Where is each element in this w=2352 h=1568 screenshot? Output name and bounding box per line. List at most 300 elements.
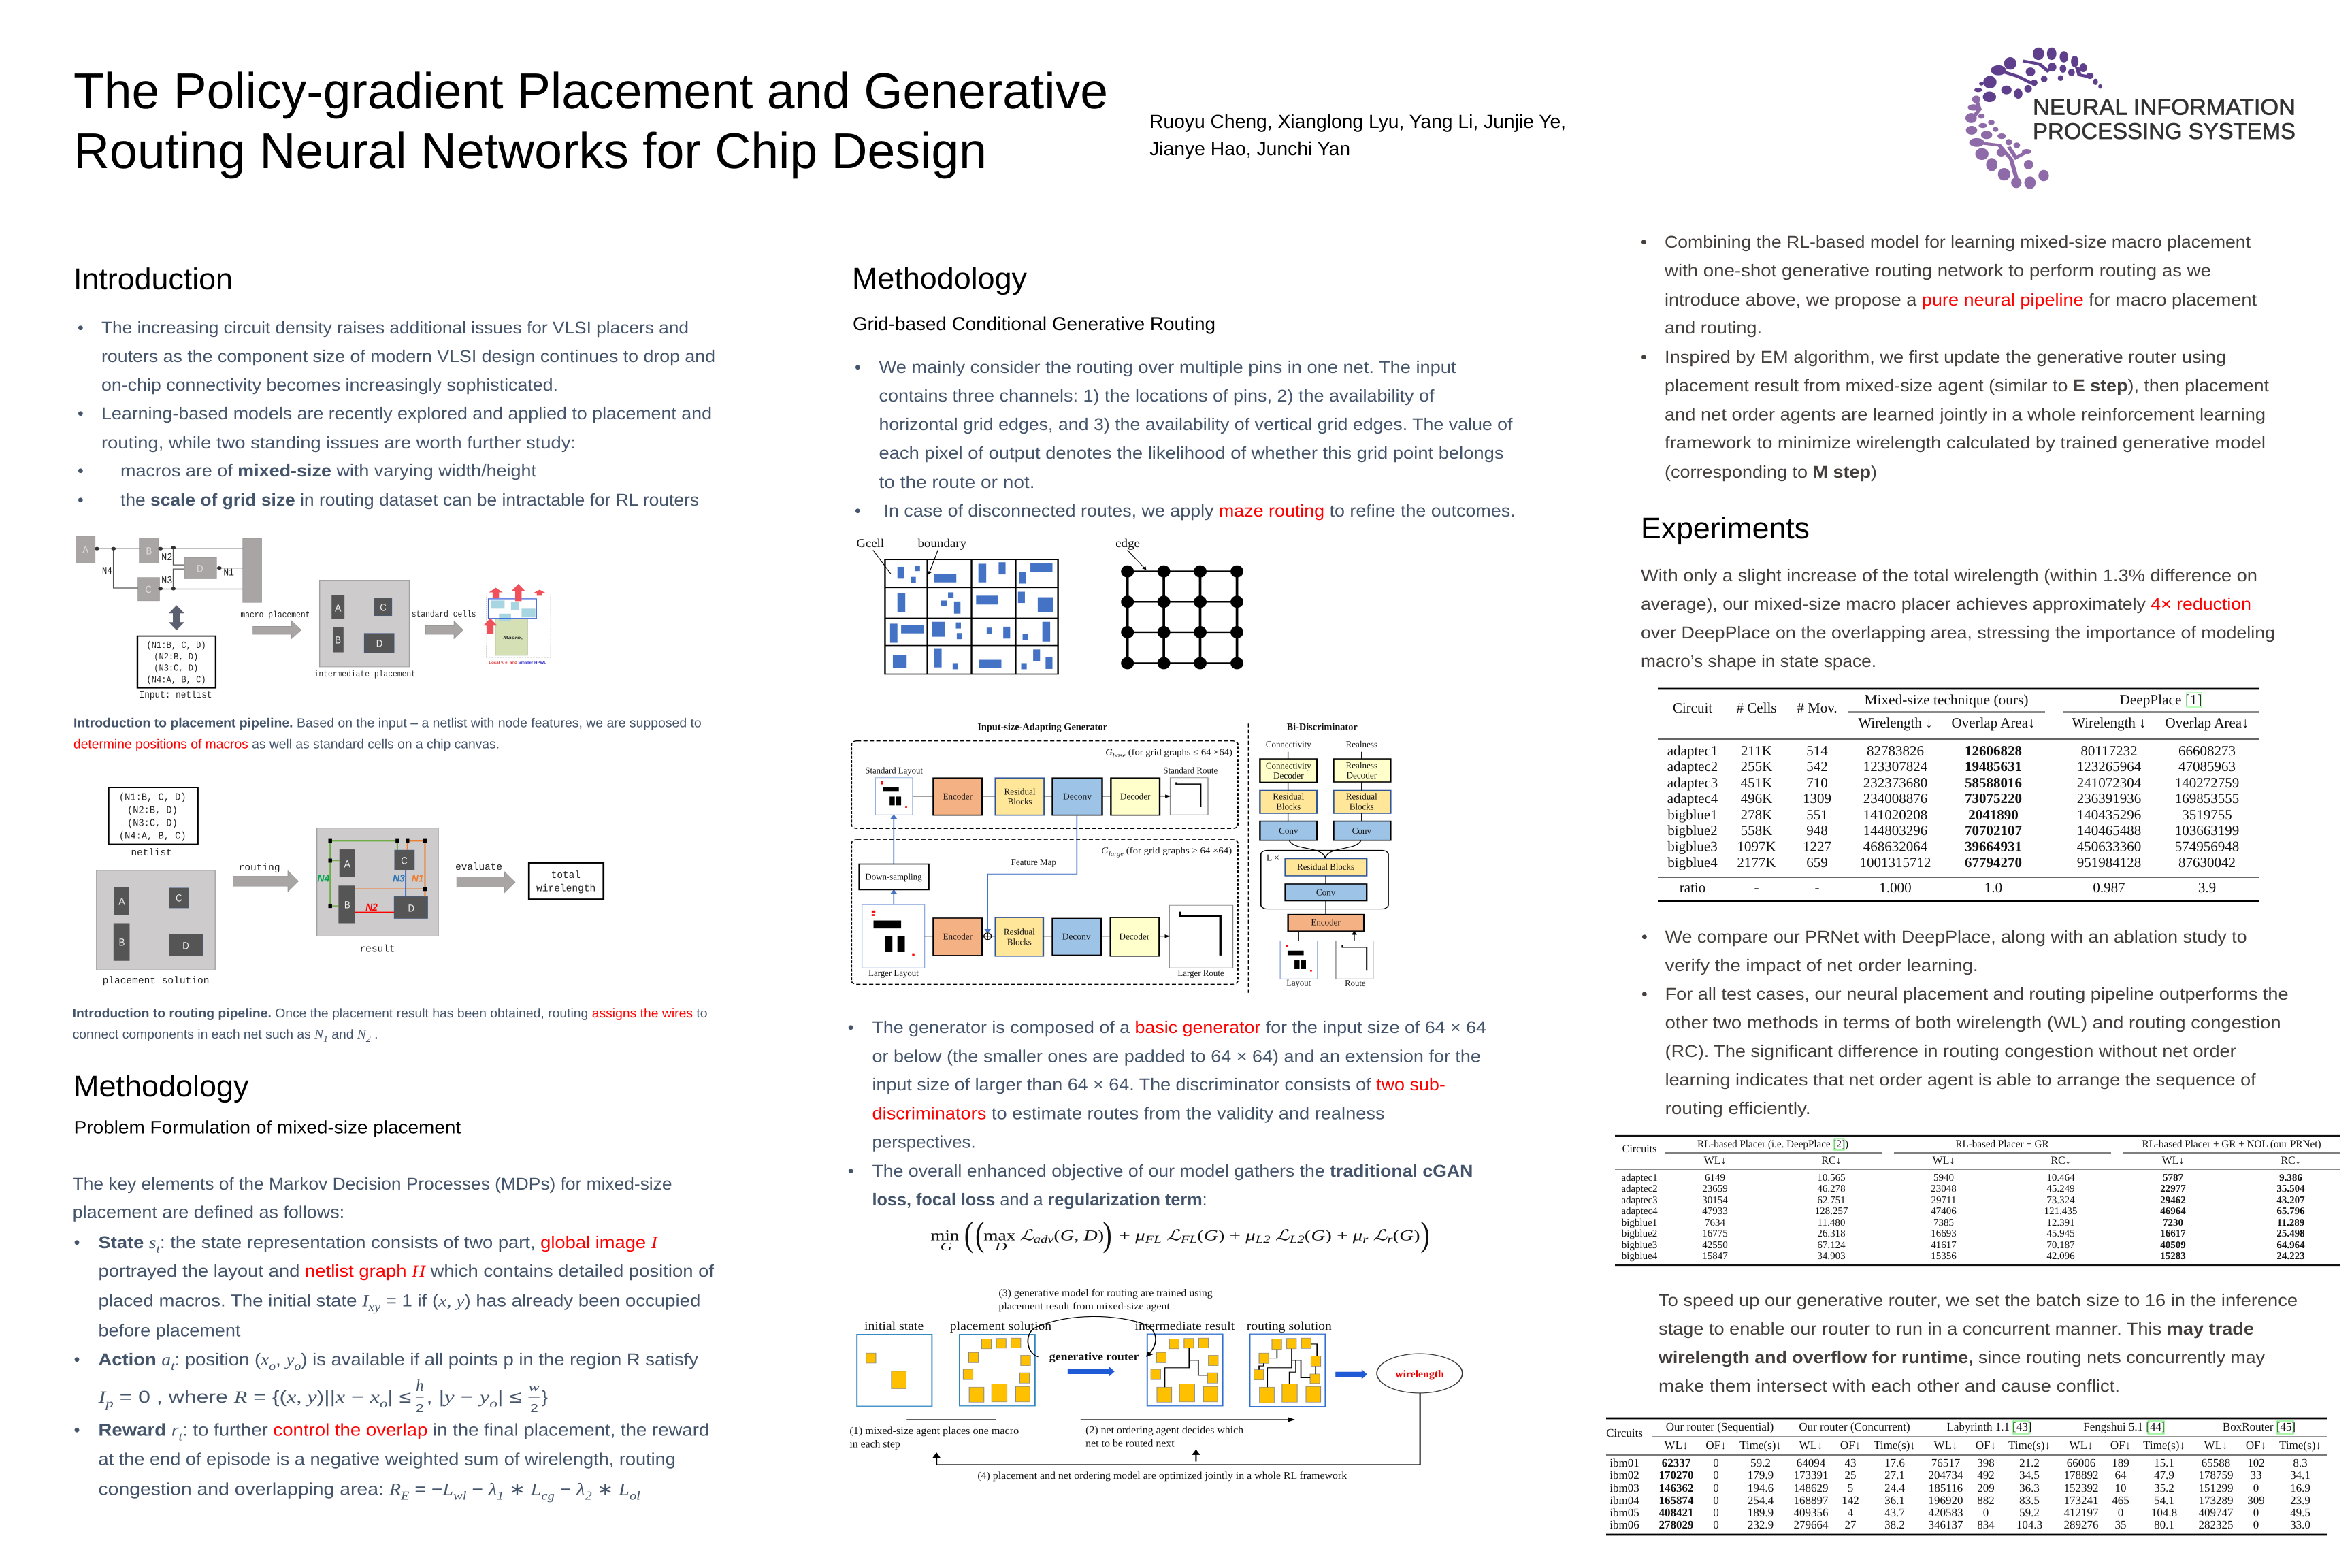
text block: runtime trade-off: wirelength and overflow for runtime, since routing nets concurrently may	[1658, 1348, 2266, 1367]
intermediate placement: D	[376, 638, 382, 649]
table: mixed-size placement vs DeepPlace: -	[1754, 879, 1759, 896]
table: router comparison: 65588	[2202, 1456, 2230, 1469]
text block: pipeline intro: placement result from mixed-size agent (similar to E step), then placement	[1665, 376, 2269, 395]
bi-discriminator diagram: Residual	[1273, 791, 1304, 802]
bullet: action: , |y − y	[426, 1387, 491, 1406]
bullet: state: t	[157, 1242, 161, 1256]
table: router comparison: 0	[2253, 1482, 2259, 1494]
table: router comparison: 173241	[2063, 1494, 2099, 1507]
placement solution panel: A	[118, 896, 125, 907]
bi-discriminator diagram: Conv	[1279, 826, 1298, 836]
table: mixed-size placement vs DeepPlace: 103663199	[2175, 822, 2239, 838]
table: mixed-size placement vs DeepPlace: 70702107	[1965, 822, 2022, 838]
text block: routing bullets: horizontal grid edges, and 3) the availability of vertical grid edges. The value of	[879, 415, 1513, 434]
table: router comparison: 173289	[2198, 1494, 2234, 1507]
generator diagram: Larger Route	[1177, 968, 1224, 978]
table: mixed-size placement vs DeepPlace: ratio	[1680, 879, 1705, 896]
table: mixed-size placement vs DeepPlace: 144803296	[1863, 822, 1927, 838]
table: ablation study: 65.796	[2276, 1206, 2305, 1217]
netlist box 2: (N4:A, B, C)	[119, 831, 186, 843]
text block: pipeline intro: •	[1641, 348, 1647, 367]
table: ablation study: 64.964	[2276, 1240, 2305, 1251]
text block: introduction bullets: routers as the component size of modern VLSI design continues to drop and	[101, 347, 715, 366]
table: ablation study: 23048	[1931, 1183, 1957, 1194]
table: router comparison: ibm01	[1610, 1456, 1639, 1469]
table: ablation study: adaptec4	[1621, 1206, 1658, 1217]
table: mixed-size placement vs DeepPlace: DeepPlace [1]	[2119, 691, 2202, 708]
table: mixed-size placement vs DeepPlace: 232373680	[1863, 774, 1927, 791]
table: router comparison: 0	[2118, 1506, 2123, 1519]
bullet: action: o	[295, 1359, 301, 1373]
table: router comparison: 59.2	[1750, 1456, 1771, 1469]
table: router comparison: 398	[1977, 1456, 1995, 1469]
table: mixed-size placement vs DeepPlace: 3519755	[2182, 806, 2232, 823]
bullet: action: | ≤	[497, 1387, 521, 1406]
table: mixed-size placement vs DeepPlace: bigblue1	[1667, 806, 1718, 823]
table: ablation study: 45.945	[2046, 1228, 2075, 1239]
objective formula: FL	[1145, 1233, 1162, 1245]
table: mixed-size placement vs DeepPlace: 140272759	[2175, 774, 2239, 791]
routing result panel: N1	[412, 872, 423, 884]
bullet: action: w	[529, 1381, 540, 1394]
table: mixed-size placement vs DeepPlace: 951984128	[2077, 854, 2141, 870]
bullet: action: 2	[416, 1402, 423, 1415]
table: mixed-size placement vs DeepPlace: 87630042	[2178, 854, 2236, 870]
table: mixed-size placement vs DeepPlace: 558K	[1741, 822, 1772, 838]
text block: pipeline intro: with one-shot generative routing network to perform routing as we	[1664, 261, 2211, 280]
generator bullets: input size of larger than 64 × 64. The discriminator consists of two sub-	[872, 1075, 1446, 1094]
table: ablation study: adaptec2	[1621, 1183, 1658, 1194]
bullet: action: 2	[530, 1402, 538, 1415]
text block: experiments summary: With only a slight increase of the total wirelength (within 1.3% difference on	[1641, 566, 2257, 585]
netlist box	[137, 636, 216, 701]
table: router comparison: 0	[1713, 1506, 1719, 1519]
text block: comparison bullets: other two methods in terms of both wirelength (WL) and routing congestion	[1665, 1013, 2281, 1032]
routing result panel: B	[344, 900, 350, 911]
table: mixed-size placement vs DeepPlace: 496K	[1741, 790, 1772, 806]
table: ablation study: adaptec1	[1621, 1173, 1658, 1183]
table: mixed-size placement vs DeepPlace: Overlap Area↓	[1951, 715, 2036, 731]
table: ablation study: 67.124	[1817, 1240, 1846, 1251]
text block: pipeline intro: Inspired by EM algorithm, we first update the generative router using	[1665, 348, 2226, 367]
joint training pipeline: wirelength	[1395, 1369, 1444, 1380]
table: router comparison: 465	[2112, 1494, 2129, 1507]
netlist schematic: N3	[161, 575, 172, 587]
table: ablation study: 41617	[1931, 1240, 1957, 1251]
bullet: state: : the state representation consists of two part,	[160, 1232, 540, 1252]
caption: placement pipeline	[74, 716, 702, 751]
netlist box: (N3:C, D)	[154, 663, 198, 674]
text block: pipeline intro: •	[1641, 233, 1647, 252]
objective formula: )	[1420, 1215, 1430, 1254]
feature map and down-sampling paths	[894, 815, 1077, 932]
table: router comparison: 189.9	[1748, 1506, 1774, 1519]
table: router comparison: 834	[1977, 1518, 1995, 1531]
table: ablation study: 29711	[1931, 1195, 1956, 1206]
table: mixed-size placement vs DeepPlace	[1658, 689, 2259, 901]
table: router comparison: 10	[2115, 1482, 2126, 1494]
table: router comparison: 0	[1713, 1494, 1719, 1507]
bullet: action	[74, 1350, 698, 1415]
bi-discriminator diagram: Decoder	[1273, 770, 1304, 781]
table: ablation study: 62.751	[1817, 1195, 1846, 1206]
table: router comparison: 409747	[2198, 1506, 2234, 1519]
netlist box: (N1:B, C, D)	[146, 640, 206, 651]
netlist schematic: N1	[223, 568, 234, 579]
netlist schematic: B	[146, 546, 152, 557]
joint training pipeline	[849, 1288, 1463, 1482]
text block: runtime trade-off	[1658, 1291, 2298, 1396]
generator diagram	[851, 721, 1248, 994]
table: ablation study: 5940	[1933, 1173, 1954, 1183]
table: router comparison: 27	[1844, 1518, 1857, 1531]
bi-discriminator diagram: Realness	[1345, 739, 1377, 749]
table: mixed-size placement vs DeepPlace: bigblue4	[1667, 854, 1718, 870]
table: ablation study: 5787	[2163, 1173, 2183, 1183]
table: router comparison: 189	[2112, 1456, 2129, 1469]
table: ablation study: RC↓	[2051, 1155, 2071, 1166]
table: mixed-size placement vs DeepPlace: 169853555	[2175, 790, 2239, 806]
table: router comparison: OF↓	[2246, 1439, 2266, 1452]
table: router comparison: WL↓	[1934, 1439, 1957, 1452]
table: router comparison: 49.5	[2290, 1506, 2310, 1519]
netlist schematic: N2	[161, 552, 172, 564]
generator diagram: Blocks	[1008, 796, 1032, 806]
MDP intro text: The key elements of the Markov Decision Processes (MDPs) for mixed-size	[73, 1174, 672, 1193]
routing result panel: D	[408, 903, 414, 914]
generator diagram: Encoder	[943, 932, 973, 942]
generator diagram: large	[1109, 850, 1124, 858]
table: router comparison: 64	[2115, 1469, 2127, 1482]
objective formula: G	[941, 1241, 952, 1253]
text block: introduction bullets: macros are of mixed-size with varying width/height	[120, 461, 536, 480]
generator diagram: base	[1113, 751, 1126, 759]
bi-discriminator diagram: Blocks	[1276, 802, 1301, 812]
caption: routing pipeline: N	[357, 1028, 367, 1042]
objective formula: ℒ	[1275, 1227, 1290, 1244]
text block: comparison bullets	[1642, 928, 2289, 1118]
bullet: reward: L	[442, 1480, 453, 1499]
bi-discriminator diagram: Encoder	[1311, 917, 1341, 928]
generator diagram: Deconv	[1062, 932, 1091, 942]
table: ablation study: 10.565	[1817, 1173, 1846, 1183]
caption: routing pipeline: 1	[323, 1034, 328, 1044]
extension generator blocks	[933, 905, 1233, 968]
table: ablation study: 15847	[1702, 1251, 1728, 1262]
bi-discriminator diagram: Route	[1345, 978, 1366, 988]
table: ablation study: 22977	[2160, 1183, 2186, 1194]
table: router comparison: 4	[1848, 1506, 1854, 1519]
text block: comparison bullets: •	[1642, 928, 1648, 947]
bi-discriminator diagram: L ×	[1267, 853, 1279, 863]
table: router comparison: 83.5	[2019, 1494, 2040, 1507]
caption: routing pipeline: .	[371, 1028, 378, 1042]
table: router comparison: Time(s)↓	[2143, 1439, 2185, 1452]
table: router comparison: 152392	[2063, 1482, 2099, 1494]
text block: introduction bullets: •	[78, 491, 84, 510]
table: router comparison: 47.9	[2154, 1469, 2174, 1482]
table: mixed-size placement vs DeepPlace: 236391936	[2077, 790, 2141, 806]
routing result panel: N3	[393, 872, 405, 884]
table: ablation study: 46964	[2160, 1206, 2186, 1217]
placement solution panel: placement solution	[103, 975, 209, 987]
objective formula: ℒ	[1373, 1227, 1388, 1244]
generator diagram: (for grid graphs > 64 ×64)	[1124, 845, 1232, 855]
label: routing: routing	[239, 862, 280, 874]
text block: routing bullets	[855, 358, 1516, 521]
subheading: grid-based routing: Grid-based Conditional Generative Routing	[853, 314, 1215, 334]
bi-discriminator diagram: Conv	[1352, 826, 1371, 836]
table: router comparison: 196920	[1929, 1494, 1963, 1507]
table: ablation study: 11.480	[1818, 1218, 1845, 1228]
table: ablation study: 40509	[2160, 1240, 2186, 1251]
table: router comparison: 289276	[2063, 1518, 2099, 1531]
intermediate placement: intermediate placement	[314, 669, 416, 679]
macro thumbnail: Macro₁	[503, 635, 523, 640]
table: mixed-size placement vs DeepPlace: 551	[1806, 806, 1828, 823]
section: generator text, objective and pipeline	[848, 1018, 1486, 1482]
generator bullets: •	[848, 1018, 853, 1037]
table: ablation study: RC↓	[2281, 1155, 2301, 1166]
table: mixed-size placement vs DeepPlace: 1.000	[1879, 879, 1912, 896]
generator diagram: Deconv	[1063, 791, 1092, 802]
routing result panel: N2	[365, 902, 378, 913]
bullet: action: x	[261, 1350, 269, 1369]
table: router comparison: Time(s)↓	[1874, 1439, 1916, 1452]
bullet: reward: −	[466, 1480, 489, 1499]
table: router comparison: 309	[2247, 1494, 2265, 1507]
table: mixed-size placement vs DeepPlace: # Mov.	[1797, 700, 1838, 716]
generator diagram: Standard Layout	[865, 766, 923, 776]
generator diagram: Feature Map	[1011, 857, 1056, 867]
objective formula: (	[964, 1215, 973, 1254]
bullet: reward: ∗	[504, 1480, 531, 1499]
label: standard cells: standard cells	[412, 609, 476, 619]
objective formula: D	[994, 1241, 1007, 1253]
objective formula: )	[1102, 1215, 1112, 1254]
table: router comparison: 142	[1842, 1494, 1859, 1507]
table: ablation study: adaptec3	[1621, 1195, 1658, 1206]
table: mixed-size placement vs DeepPlace: adaptec4	[1667, 790, 1718, 806]
generator diagram: Standard Route	[1163, 766, 1218, 776]
table: mixed-size placement vs DeepPlace: 58588016	[1965, 774, 2022, 791]
table: router comparison: 254.4	[1748, 1494, 1774, 1507]
generator diagram: Residual	[1004, 787, 1035, 796]
table: mixed-size placement vs DeepPlace: adaptec3	[1667, 774, 1718, 791]
MDP intro text: placement are defined as follows:	[73, 1203, 344, 1222]
caption: routing pipeline: Introduction to routing pipeline. Once the placement result has been obtained, routing assigns the wires to	[73, 1006, 708, 1020]
table: router comparison: Fengshui 5.1 [44]	[2083, 1420, 2166, 1433]
table: router comparison: 33	[2250, 1469, 2262, 1482]
bullet: action: t	[171, 1359, 175, 1373]
bi-discriminator diagram: Connectivity	[1266, 761, 1311, 770]
joint training pipeline: (1) mixed-size agent places one macro	[849, 1425, 1019, 1437]
intermediate placement	[314, 581, 416, 679]
bullet: reward: •	[74, 1420, 80, 1439]
bullet: reward: E	[401, 1489, 410, 1502]
table: mixed-size placement vs DeepPlace: 1.0	[1984, 879, 2002, 896]
table: router comparison: 0	[1713, 1469, 1719, 1482]
table: router comparison: 62337	[1662, 1456, 1691, 1469]
table: mixed-size placement vs DeepPlace: 140465488	[2077, 822, 2141, 838]
table: ablation study: 16693	[1931, 1228, 1957, 1239]
table: ablation study: Circuits	[1622, 1143, 1656, 1155]
table: router comparison: 178759	[2198, 1469, 2234, 1482]
table: mixed-size placement vs DeepPlace: Circuit	[1673, 700, 1712, 716]
macro thumbnail	[483, 584, 551, 664]
title: The Policy-gradient Placement and Generative	[74, 63, 1108, 119]
table: router comparison: 34.5	[2019, 1469, 2040, 1482]
bullet: reward: Reward r	[98, 1420, 189, 1439]
generator diagram: Residual	[1004, 927, 1035, 937]
placement solution panel: D	[182, 940, 189, 951]
table: mixed-size placement vs DeepPlace: bigblue2	[1667, 822, 1718, 838]
table: ablation study: 42550	[1702, 1240, 1728, 1251]
table: ablation study: 70.187	[2046, 1240, 2075, 1251]
text block: runtime trade-off: make them intersect with each other and cause conflict.	[1659, 1377, 2120, 1396]
routing result panel: C	[401, 855, 408, 866]
netlist box 2: netlist	[131, 847, 172, 859]
table: router comparison: 33.0	[2290, 1518, 2310, 1531]
table: ablation study: 29462	[2160, 1195, 2186, 1206]
gcell grid	[857, 536, 1058, 674]
bi-discriminator diagram: Residual	[1346, 791, 1377, 802]
figures: routing grid and GAN architecture	[851, 536, 1390, 994]
table: mixed-size placement vs DeepPlace: 278K	[1741, 806, 1772, 823]
label: macro placement: macro placement	[240, 610, 310, 620]
routing result panel: N4	[317, 872, 330, 884]
bullet: state	[74, 1232, 714, 1340]
caption: routing pipeline: 2	[366, 1034, 371, 1044]
table: ablation study: 121.435	[2044, 1206, 2077, 1217]
text block: comparison bullets: learning indicates that net order agent is able to arrange the sequence of	[1665, 1071, 2256, 1090]
table: ablation study: RL-based Placer + GR	[1956, 1139, 2049, 1150]
heading: Methodology column 2: Methodology	[852, 262, 1027, 295]
table: mixed-size placement vs DeepPlace: 47085963	[2178, 758, 2236, 774]
table: router comparison: 59.2	[2019, 1506, 2040, 1519]
table: router comparison: 0	[2253, 1518, 2259, 1531]
table: router comparison: Time(s)↓	[1740, 1439, 1782, 1452]
bullet: action: •	[74, 1350, 80, 1369]
generator bullets	[848, 1018, 1486, 1209]
placement solution panel: B	[119, 936, 125, 948]
table: ablation study: 6149	[1705, 1173, 1725, 1183]
caption: routing pipeline: and	[328, 1028, 357, 1042]
table: ablation study: 7634	[1705, 1218, 1726, 1228]
table: ablation study: 47933	[1702, 1206, 1728, 1217]
routing result panel: result	[359, 943, 395, 955]
netlist schematic: N4	[102, 566, 112, 577]
objective formula: L2	[1255, 1233, 1271, 1245]
objective formula: r	[1387, 1233, 1393, 1245]
table: router comparison: OF↓	[1840, 1439, 1861, 1452]
text block: runtime trade-off: To speed up our generative router, we set the batch size to 16 in the inference	[1659, 1291, 2298, 1310]
generator bullets: discriminators to estimate routes from the validity and realness	[872, 1104, 1385, 1123]
text block: routing bullets: each pixel of output denotes the likelihood of whether this grid point belongs	[879, 444, 1504, 463]
table: router comparison: ibm02	[1610, 1469, 1639, 1482]
netlist schematic	[76, 536, 261, 602]
table: mixed-size placement vs DeepPlace: 241072304	[2077, 774, 2142, 791]
bullet: action: o	[489, 1396, 497, 1410]
table: mixed-size placement vs DeepPlace: 2177K	[1737, 854, 1776, 870]
table: router comparison: 16.9	[2290, 1482, 2310, 1494]
bullet: reward: control the overlap in the final placement, the reward	[273, 1420, 804, 1439]
table: ablation study: 30154	[1702, 1195, 1728, 1206]
table: mixed-size placement vs DeepPlace: 255K	[1741, 758, 1772, 774]
heading: Introduction: Introduction	[74, 263, 233, 296]
table: router comparison: 148629	[1794, 1482, 1828, 1494]
table: router comparison: 204734	[1929, 1469, 1963, 1482]
text block: pipeline intro: (corresponding to M step )	[1665, 463, 1877, 482]
generator bullets: The overall enhanced objective of our model gathers the traditional cGAN	[872, 1161, 1473, 1180]
text block: routing bullets: •	[855, 358, 861, 377]
table: router comparison: 15.1	[2154, 1456, 2174, 1469]
table: router comparison: 35	[2115, 1518, 2126, 1531]
table: ablation study: 15356	[1931, 1251, 1957, 1262]
table: mixed-size placement vs DeepPlace: Overlap Area↓	[2165, 715, 2249, 731]
table: ablation study: 45.249	[2046, 1183, 2075, 1194]
text block: comparison bullets: verify the impact of net order learning.	[1665, 956, 1978, 975]
table: router comparison: Circuits	[1606, 1426, 1643, 1439]
bullet: action: | ≤	[387, 1387, 411, 1406]
table: router comparison: 412197	[2063, 1506, 2099, 1519]
edge grid graph	[1115, 536, 1243, 669]
table: router comparison: WL↓	[2204, 1439, 2227, 1452]
text block: routing bullets: We mainly consider the routing over multiple pins in one net. The input	[879, 358, 1456, 377]
table: mixed-size placement vs DeepPlace: 12606828	[1965, 742, 2022, 759]
table: router comparison: 102	[2247, 1456, 2265, 1469]
joint training pipeline: initial state	[864, 1319, 924, 1333]
bullet: reward: : to further	[182, 1420, 273, 1439]
bi-discriminator diagram: Decoder	[1346, 770, 1377, 781]
placement solution panel: C	[176, 893, 182, 904]
generator diagram: Down-sampling	[865, 872, 922, 882]
arrow	[425, 621, 463, 639]
table: mixed-size placement vs DeepPlace: 19485631	[1965, 758, 2022, 774]
table: ablation study: 35.504	[2276, 1183, 2305, 1194]
bi-discriminator diagram	[1260, 721, 1390, 988]
text block: introduction bullets	[78, 318, 715, 510]
text block: experiments summary: average), our mixed-size macro placer achieves approximately 4× reduction	[1641, 595, 2251, 614]
table: router comparison: 146362	[1659, 1482, 1693, 1494]
table: router comparison: WL↓	[1799, 1439, 1823, 1452]
table: mixed-size placement vs DeepPlace: 514	[1806, 742, 1828, 759]
bullet: action: h	[416, 1375, 423, 1394]
bullet: reward: t	[179, 1430, 183, 1443]
table: router comparison: 151299	[2198, 1482, 2234, 1494]
bullet: state: placed macros. The initial state I	[98, 1291, 444, 1310]
table: router comparison: 38.2	[1884, 1518, 1905, 1531]
bullet: state: State s	[98, 1232, 160, 1252]
table: mixed-size placement vs DeepPlace: 123265964	[2077, 758, 2142, 774]
text block: routing bullets: contains three channels: 1) the locations of pins, 2) the availability of	[879, 387, 1435, 406]
netlist box 2	[108, 787, 198, 859]
table: router comparison: 408421	[1659, 1506, 1693, 1519]
caption: routing pipeline	[73, 1006, 708, 1044]
bi-discriminator diagram: Blocks	[1350, 802, 1374, 812]
bullet: reward: cg	[542, 1489, 555, 1502]
netlist box 2: (N2:B, D)	[127, 804, 178, 816]
generator diagram: Encoder	[943, 791, 973, 802]
table: ablation study: 128.257	[1815, 1206, 1848, 1217]
bullet: action: o	[269, 1359, 276, 1373]
bullet: state: portrayed the layout and netlist graph H which contains detailed position of	[98, 1261, 714, 1280]
table: mixed-size placement vs DeepPlace: -	[1814, 879, 1820, 896]
table: router comparison: 492	[1977, 1469, 1995, 1482]
bi-discriminator diagram: Realness	[1345, 760, 1377, 770]
text block: experiments summary	[1641, 566, 2275, 671]
table: ablation study: 25.498	[2276, 1228, 2305, 1239]
